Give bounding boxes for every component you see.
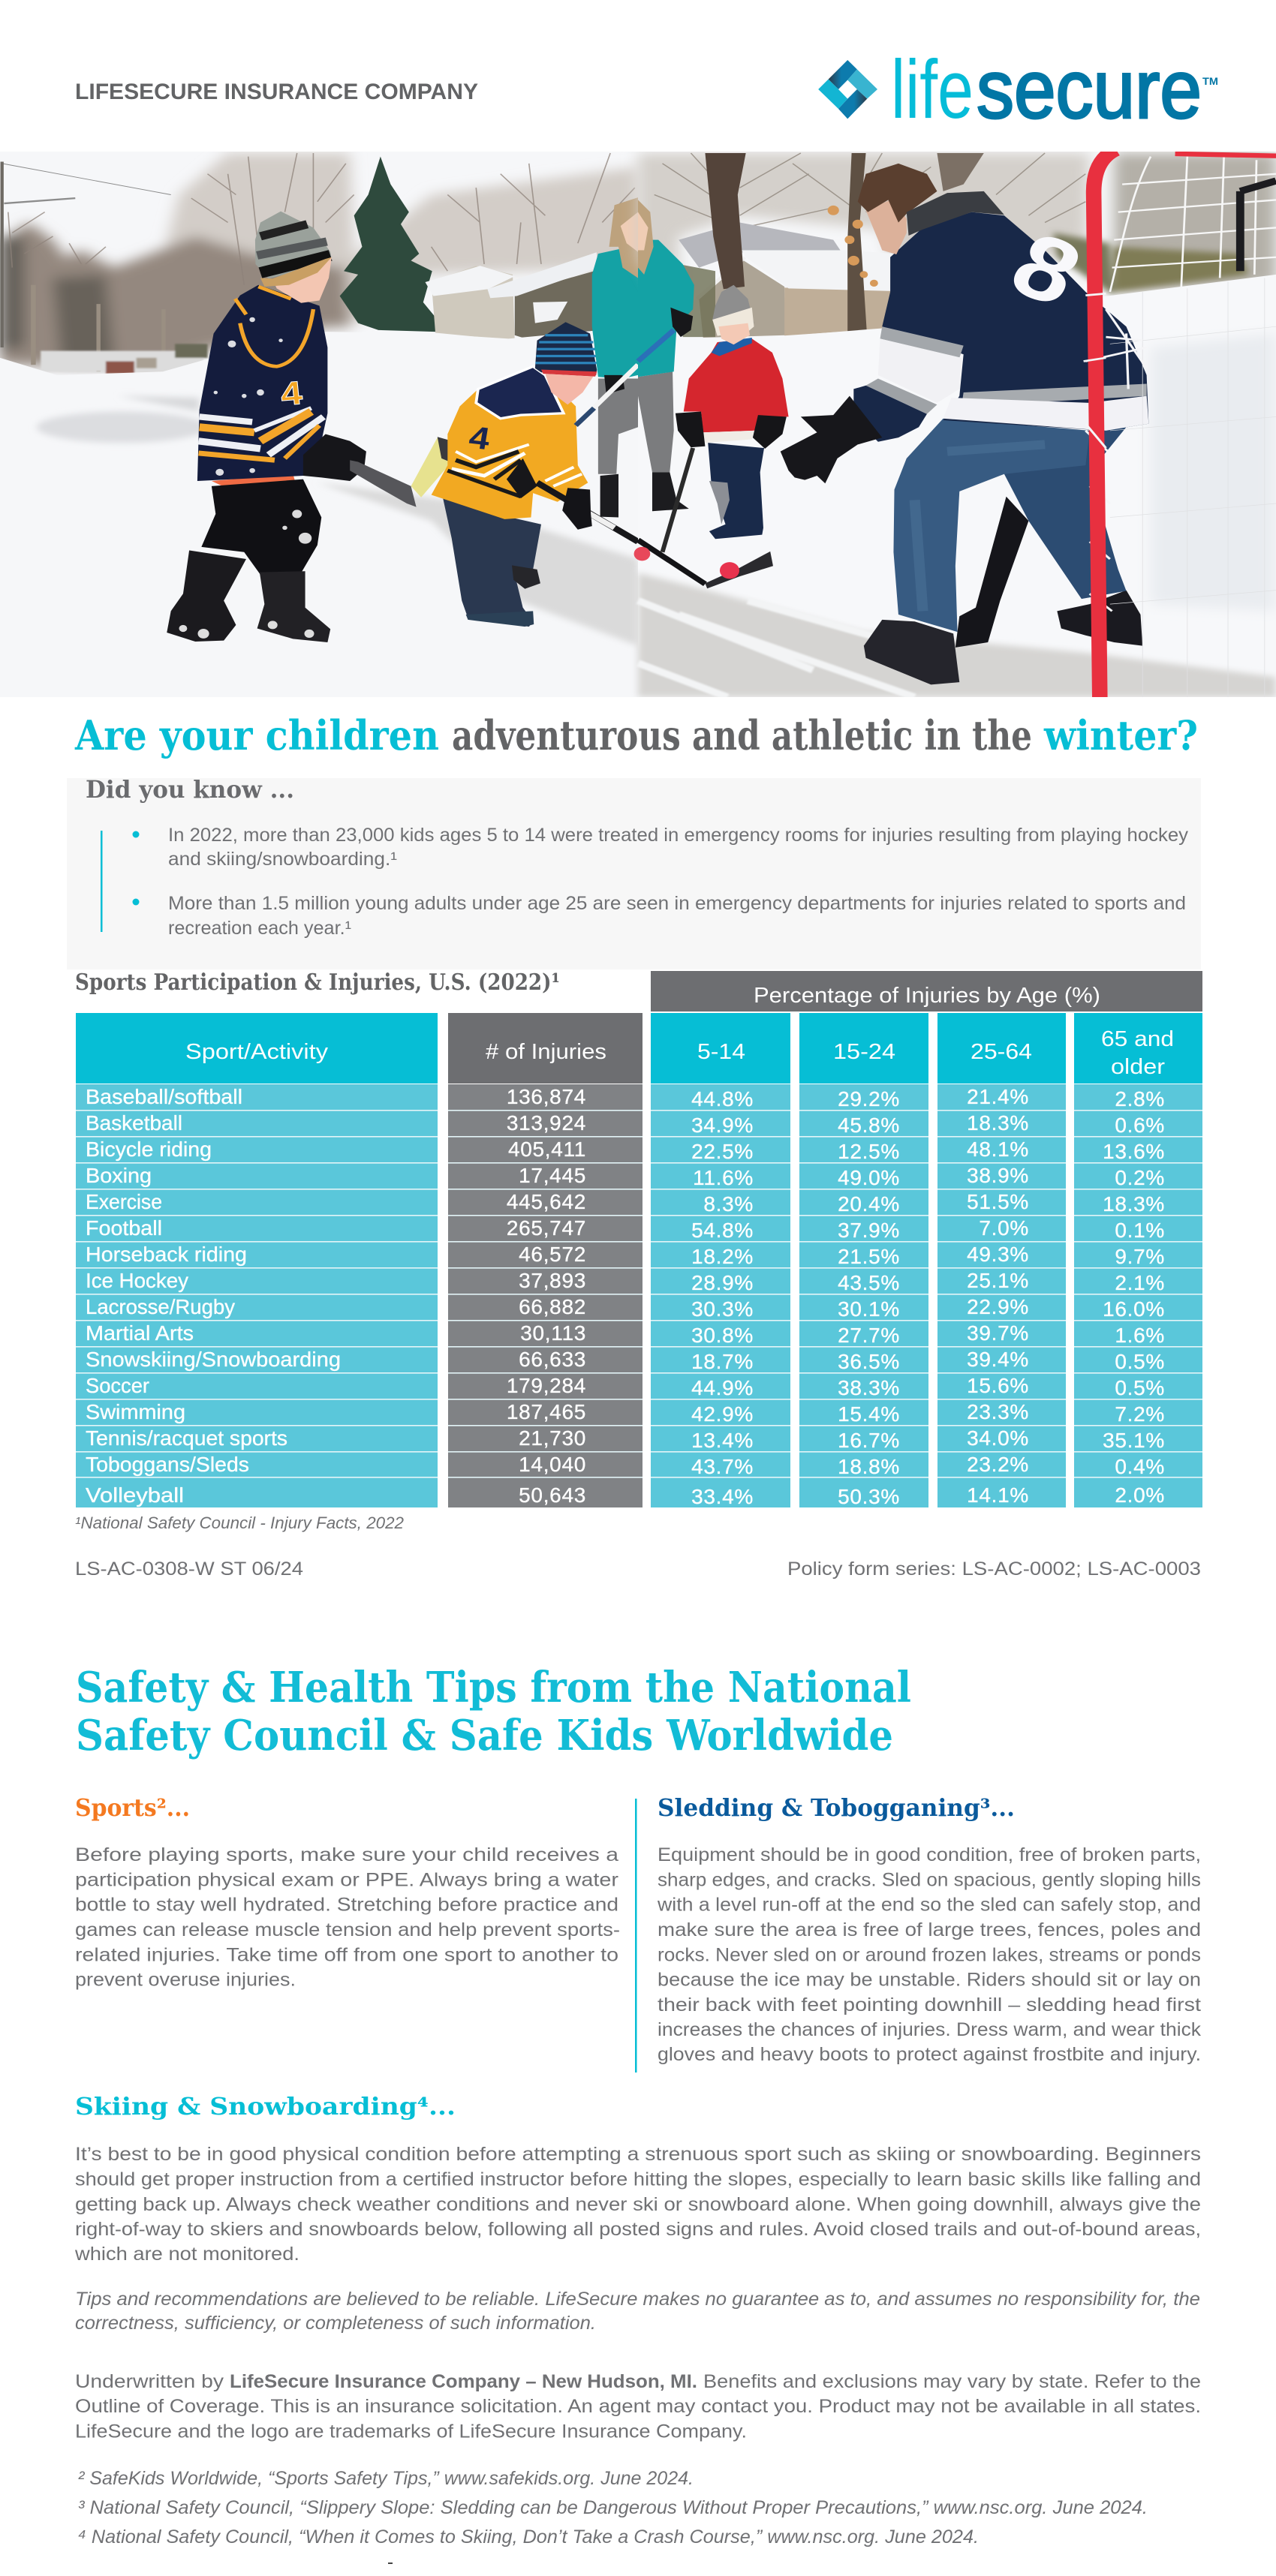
row: swimming: 23.3% bbox=[967, 1400, 1029, 1423]
row: lacrosse/rugby: 66,882 bbox=[519, 1295, 586, 1318]
body: sledding: sharp edges, and cracks. Sled on spacious, gently sloping hills bbox=[658, 1869, 1201, 1890]
row: snowskiing/snowboarding: 18.7% bbox=[691, 1350, 754, 1373]
main title: Are your children bbox=[74, 711, 439, 759]
row: tennis/racquet sports: 21,730 bbox=[519, 1426, 586, 1450]
row: lacrosse/rugby: Lacrosse/Rugby bbox=[86, 1295, 235, 1318]
body: sports: related injuries. Take time off from one sport to another to bbox=[75, 1944, 618, 1965]
row: toboggans/sleds: 14,040 bbox=[519, 1453, 586, 1476]
footnotes bbox=[78, 2468, 1148, 2547]
row: exercise: 445,642 bbox=[507, 1190, 586, 1213]
row: swimming bbox=[86, 1400, 1165, 1426]
heading: skiing: Skiing & Snowboarding⁴... bbox=[75, 2092, 456, 2121]
heading: did you know: Did you know ... bbox=[86, 775, 294, 804]
snow shading bbox=[1151, 333, 1276, 611]
row: soccer: 15.6% bbox=[967, 1374, 1029, 1397]
footnotes: ⁴ National Safety Council, “When it Comes to Skiing, Don’t Take a Crash Course,” www.nsc.org. June 2024. bbox=[78, 2526, 979, 2547]
row: snowskiing/snowboarding: Snowskiing/Snowboarding bbox=[86, 1348, 341, 1371]
header row: older bbox=[1111, 1055, 1165, 1079]
figure: father in navy jersey bbox=[781, 164, 1148, 684]
row: swimming: 42.9% bbox=[691, 1402, 754, 1426]
row: toboggans/sleds bbox=[86, 1453, 1165, 1478]
row: toboggans/sleds: 0.4% bbox=[1115, 1455, 1165, 1478]
row: volleyball: 2.0% bbox=[1115, 1483, 1165, 1507]
row: ice hockey: 37,893 bbox=[519, 1269, 586, 1292]
row: football: 7.0% bbox=[979, 1216, 1029, 1240]
header row bbox=[76, 1013, 1202, 1084]
policy form series: Policy form series: LS-AC-0002; LS-AC-0003 bbox=[787, 1559, 1201, 1580]
body: sledding bbox=[657, 1844, 1202, 2065]
body: sledding: Equipment should be in good condition, free of broken parts, bbox=[658, 1844, 1201, 1865]
underwriter statement: Underwritten by bbox=[75, 2371, 224, 2392]
bare branches left bbox=[8, 153, 635, 285]
row: basketball: 18.3% bbox=[967, 1111, 1029, 1135]
table footnote: ¹National Safety Council - Injury Facts, 2022 bbox=[75, 1513, 404, 1532]
trademark: TM bbox=[1202, 75, 1218, 87]
road bbox=[638, 573, 1276, 697]
figure: mother right part bbox=[638, 200, 694, 511]
row: tennis/racquet sports: 35.1% bbox=[1103, 1429, 1165, 1452]
header: percentage of injuries by age: Percentage of Injuries by Age (%) bbox=[754, 984, 1100, 1008]
row: tennis/racquet sports: Tennis/racquet sports bbox=[86, 1426, 287, 1450]
row: basketball: Basketball bbox=[86, 1111, 182, 1135]
photo: family playing street hockey in snow bbox=[0, 149, 1276, 697]
disclaimer bbox=[75, 2289, 1200, 2334]
body: sledding: gloves and heavy boots to protect against frostbite and injury. bbox=[658, 2044, 1201, 2065]
row: exercise: 51.5% bbox=[967, 1190, 1029, 1213]
section: skiing and snowboarding bbox=[74, 2092, 1201, 2265]
header row: 25-64 bbox=[971, 1040, 1032, 1064]
row: lacrosse/rugby: 16.0% bbox=[1103, 1297, 1165, 1321]
row: bicycle riding: Bicycle riding bbox=[86, 1138, 212, 1161]
row: swimming: 15.4% bbox=[838, 1402, 900, 1426]
hockey stick and balls bbox=[634, 540, 773, 588]
row: horseback riding: Horseback riding bbox=[86, 1243, 247, 1266]
row: snowskiing/snowboarding bbox=[86, 1348, 1165, 1373]
row: boxing: 17,445 bbox=[519, 1164, 586, 1187]
snowbank bbox=[638, 275, 1276, 697]
fact 2 bbox=[132, 893, 1186, 939]
row: basketball: 34.9% bbox=[691, 1114, 754, 1137]
disclaimer: Tips and recommendations are believed to be reliable. LifeSecure makes no guarantee as to, and assumes no responsibility for, the bbox=[75, 2289, 1200, 2310]
heading: sledding: Sledding & Tobogganing³... bbox=[658, 1793, 1015, 1822]
small print mark bbox=[388, 2562, 393, 2564]
row: toboggans/sleds: 18.8% bbox=[838, 1455, 900, 1478]
row: basketball: 0.6% bbox=[1115, 1114, 1165, 1137]
row: baseball/softball: 2.8% bbox=[1115, 1087, 1165, 1111]
figure: mother left part bbox=[576, 197, 638, 518]
header: company name: LIFESECURE INSURANCE COMPANY bbox=[75, 80, 478, 104]
form code: LS-AC-0308-W ST 06/24 bbox=[75, 1559, 303, 1580]
header row: 5-14 bbox=[697, 1040, 745, 1064]
body: sledding: make sure the area is free of large trees, fences, poles and bbox=[658, 1919, 1201, 1940]
body: sledding: with a level run-off at the end so the sled can safely stop, and bbox=[657, 1895, 1201, 1916]
header row: # of Injuries bbox=[486, 1040, 606, 1064]
figure: boy in navy jersey: 4 bbox=[279, 375, 304, 413]
body: sledding: rocks. Never sled on or around frozen lakes, streams or ponds bbox=[658, 1944, 1201, 1965]
row: swimming: 7.2% bbox=[1115, 1402, 1165, 1426]
row: horseback riding bbox=[86, 1243, 1165, 1268]
row: exercise: 8.3% bbox=[703, 1192, 754, 1216]
row: toboggans/sleds: 23.2% bbox=[967, 1453, 1029, 1476]
row: volleyball: Volleyball bbox=[86, 1483, 184, 1507]
row: toboggans/sleds: Toboggans/Sleds bbox=[86, 1453, 249, 1476]
goal net and post bbox=[1084, 149, 1276, 697]
row: martial arts: Martial Arts bbox=[86, 1321, 194, 1345]
row: football: Football bbox=[86, 1216, 162, 1240]
row: horseback riding: 21.5% bbox=[838, 1245, 900, 1268]
row: bicycle riding bbox=[86, 1138, 1165, 1163]
figure: father in navy jersey: 8 bbox=[995, 212, 1097, 325]
body: sports: bottle to stay well hydrated. Stretching before practice and bbox=[75, 1895, 618, 1916]
row: horseback riding: 46,572 bbox=[519, 1243, 586, 1266]
row: baseball/softball: 136,874 bbox=[507, 1085, 586, 1108]
row: baseball/softball bbox=[86, 1085, 1165, 1111]
column: sports tips bbox=[75, 1793, 620, 1991]
row: baseball/softball: Baseball/softball bbox=[86, 1085, 242, 1108]
figure: boy in yellow jersey: 4 bbox=[467, 419, 492, 456]
main title: winter? bbox=[1043, 711, 1198, 759]
row: boxing: 38.9% bbox=[967, 1164, 1029, 1187]
main title bbox=[74, 711, 1198, 759]
row: soccer: 44.9% bbox=[691, 1376, 754, 1399]
fact 1: and skiing/snowboarding.¹ bbox=[168, 849, 397, 870]
fact 2: More than 1.5 million young adults under age 25 are seen in emergency departments for injuries related to sports and bbox=[168, 893, 1186, 914]
row: exercise bbox=[86, 1190, 1165, 1216]
header: percentage of injuries by age bbox=[651, 971, 1202, 1011]
underwriter statement: Outline of Coverage. This is an insurance solicitation. An agent may contact you. Product may not be available in all states. bbox=[75, 2396, 1201, 2417]
body: skiing: right-of-way to skiers and snowboards below, following all posted signs and rules. Avoid closed trails and out-of-bound areas, bbox=[75, 2219, 1201, 2240]
header row: 15-24 bbox=[833, 1040, 895, 1064]
row: ice hockey: 2.1% bbox=[1115, 1271, 1165, 1294]
footnotes: ² SafeKids Worldwide, “Sports Safety Tips,” www.safekids.org. June 2024. bbox=[78, 2468, 694, 2489]
column: sledding tips bbox=[657, 1793, 1202, 2065]
row: baseball/softball: 44.8% bbox=[691, 1087, 754, 1111]
body: skiing: getting back up. Always check weather conditions and never ski or snowboard alone. When going downhill, always give the bbox=[75, 2194, 1201, 2215]
row: martial arts: 39.7% bbox=[967, 1321, 1029, 1345]
fact 2: recreation each year.¹ bbox=[168, 918, 351, 939]
underwriter statement bbox=[75, 2371, 1201, 2442]
fact 1 bbox=[132, 825, 1189, 870]
row: lacrosse/rugby: 30.3% bbox=[691, 1297, 754, 1321]
logo: lifesecure bbox=[818, 44, 1218, 136]
houses bbox=[432, 266, 515, 341]
body: sledding: because the ice may be unstable. Riders should sit or lay on bbox=[658, 1970, 1201, 1991]
row: soccer: 38.3% bbox=[838, 1376, 900, 1399]
row: ice hockey: 25.1% bbox=[967, 1269, 1029, 1292]
photo right half: background, child in red, father, goal bbox=[634, 149, 1276, 697]
row: basketball: 313,924 bbox=[507, 1111, 586, 1135]
row: volleyball: 14.1% bbox=[967, 1483, 1029, 1507]
body: sledding: increases the chances of injuries. Dress warm, and wear thick bbox=[658, 2019, 1202, 2040]
row: boxing: 11.6% bbox=[693, 1166, 754, 1189]
row: martial arts: 30,113 bbox=[520, 1321, 586, 1345]
row: martial arts: 1.6% bbox=[1115, 1324, 1165, 1347]
body: sports: Before playing sports, make sure your child receives a bbox=[75, 1844, 618, 1865]
row: ice hockey: Ice Hockey bbox=[86, 1269, 188, 1292]
row: soccer: 0.5% bbox=[1115, 1376, 1165, 1399]
row: boxing: Boxing bbox=[86, 1164, 152, 1187]
row: bicycle riding: 22.5% bbox=[691, 1140, 754, 1163]
body: skiing bbox=[74, 2144, 1201, 2265]
body: sports: participation physical exam or PPE. Always bring a water bbox=[75, 1869, 618, 1890]
row: bicycle riding: 13.6% bbox=[1103, 1140, 1165, 1163]
section title: safety and health tips bbox=[76, 1663, 911, 1760]
row: snowskiing/snowboarding: 0.5% bbox=[1115, 1350, 1165, 1373]
snow ground bbox=[0, 326, 638, 697]
header row: 65 and bbox=[1101, 1027, 1174, 1051]
body: sledding: their back with feet pointing downhill – sledding head first bbox=[658, 1994, 1201, 2015]
body: skiing: which are not monitored. bbox=[74, 2244, 299, 2265]
row: tennis/racquet sports: 34.0% bbox=[967, 1426, 1029, 1450]
body: sports: games can release muscle tension and help prevent sports- bbox=[75, 1919, 620, 1940]
row: bicycle riding: 48.1% bbox=[967, 1138, 1029, 1161]
row: soccer: Soccer bbox=[86, 1374, 149, 1397]
section title: safety and health tips: Safety & Health Tips from the National bbox=[76, 1663, 911, 1712]
row: exercise: 20.4% bbox=[838, 1192, 900, 1216]
underwriter statement: LifeSecure Insurance Company – New Hudson, MI. bbox=[230, 2371, 697, 2392]
row: baseball/softball: 21.4% bbox=[967, 1085, 1029, 1108]
row: ice hockey: 43.5% bbox=[838, 1271, 900, 1294]
row: ice hockey bbox=[86, 1269, 1165, 1294]
footnotes: ³ National Safety Council, “Slippery Slope: Sledding can be Dangerous Without Proper Precautions,” www.nsc.org. June 2024. bbox=[78, 2497, 1148, 2518]
icon: diamond mark bbox=[818, 60, 877, 119]
fact 1: In 2022, more than 23,000 kids ages 5 to 14 were treated in emergency rooms for injuries resulting from playing hockey bbox=[168, 825, 1189, 846]
row: snowskiing/snowboarding: 66,633 bbox=[519, 1348, 586, 1371]
row: exercise: 18.3% bbox=[1103, 1192, 1165, 1216]
row: horseback riding: 9.7% bbox=[1115, 1245, 1165, 1268]
divider bbox=[635, 1799, 636, 2073]
row: bicycle riding: 405,411 bbox=[508, 1138, 586, 1161]
heading: sports: Sports²... bbox=[75, 1793, 190, 1822]
row: swimming: 187,465 bbox=[507, 1400, 586, 1423]
underwriter statement: Benefits and exclusions may vary by state. Refer to the bbox=[703, 2371, 1201, 2392]
body: sports: prevent overuse injuries. bbox=[75, 1970, 296, 1991]
table title: Sports Participation & Injuries, U.S. (2022)¹ bbox=[75, 969, 560, 996]
bare branches right bbox=[655, 153, 1085, 230]
row: ice hockey: 28.9% bbox=[691, 1271, 754, 1294]
row: martial arts: 30.8% bbox=[691, 1324, 754, 1347]
row: soccer bbox=[86, 1374, 1165, 1399]
body: skiing: should get proper instruction from a certified instructor before hitting the slopes, especially to learn basic skills like falling and bbox=[75, 2169, 1201, 2190]
far street houses bbox=[41, 344, 207, 374]
row: football: 0.1% bbox=[1115, 1219, 1165, 1242]
row: lacrosse/rugby bbox=[86, 1295, 1165, 1321]
row: lacrosse/rugby: 30.1% bbox=[838, 1297, 900, 1321]
row: tennis/racquet sports bbox=[86, 1426, 1165, 1452]
row: snowskiing/snowboarding: 39.4% bbox=[967, 1348, 1029, 1371]
figure: boy in yellow jersey bbox=[432, 322, 638, 627]
row: volleyball: 50,643 bbox=[519, 1483, 586, 1507]
row: martial arts: 27.7% bbox=[838, 1324, 900, 1347]
row: lacrosse/rugby: 22.9% bbox=[967, 1295, 1029, 1318]
row: boxing: 49.0% bbox=[838, 1166, 900, 1189]
logo wordmark life: life bbox=[891, 44, 974, 136]
row: boxing bbox=[86, 1164, 1165, 1189]
main title: adventurous and athletic in the bbox=[452, 711, 1032, 759]
logo wordmark secure: secure bbox=[977, 44, 1202, 136]
row: volleyball: 50.3% bbox=[838, 1485, 900, 1508]
table: sports injuries by age bbox=[76, 971, 1202, 1508]
accent line bbox=[101, 831, 102, 932]
row: horseback riding: 18.2% bbox=[691, 1245, 754, 1268]
tree trunks bbox=[705, 153, 746, 289]
row: martial arts bbox=[86, 1321, 1165, 1347]
road shadows bbox=[37, 396, 638, 646]
row: horseback riding: 49.3% bbox=[967, 1243, 1029, 1266]
underwriter statement: LifeSecure and the logo are trademarks of LifeSecure Insurance Company. bbox=[75, 2421, 747, 2442]
row: snowskiing/snowboarding: 36.5% bbox=[838, 1350, 900, 1373]
body: skiing: It’s best to be in good physical condition before attempting a strenuous sport such as skiing or snowboarding. Beginners bbox=[75, 2144, 1201, 2165]
row: soccer: 179,284 bbox=[507, 1374, 586, 1397]
row: basketball bbox=[86, 1111, 1165, 1137]
figure: boy in navy jersey bbox=[167, 212, 455, 642]
row: football: 265,747 bbox=[507, 1216, 586, 1240]
evergreen tree bbox=[340, 157, 438, 332]
row: basketball: 45.8% bbox=[838, 1114, 900, 1137]
disclaimer: correctness, sufficiency, or completeness of such information. bbox=[75, 2313, 596, 2334]
figure: child in red sweater bbox=[663, 285, 789, 552]
table body cells bbox=[76, 1084, 1202, 1507]
row: tennis/racquet sports: 16.7% bbox=[838, 1429, 900, 1452]
row: football: 54.8% bbox=[691, 1219, 754, 1242]
row: boxing: 0.2% bbox=[1115, 1166, 1165, 1189]
row: tennis/racquet sports: 13.4% bbox=[691, 1429, 754, 1452]
row: volleyball bbox=[86, 1483, 1165, 1508]
row: toboggans/sleds: 43.7% bbox=[691, 1455, 754, 1478]
header row: Sport/Activity bbox=[185, 1040, 329, 1064]
body: sports bbox=[75, 1844, 620, 1991]
row: football: 37.9% bbox=[838, 1219, 900, 1242]
row: exercise: Exercise bbox=[86, 1190, 162, 1213]
shed and house bbox=[679, 222, 841, 268]
row: swimming: Swimming bbox=[86, 1400, 185, 1423]
panel: did you know bbox=[67, 775, 1201, 969]
row: baseball/softball: 29.2% bbox=[838, 1087, 900, 1111]
row: football bbox=[86, 1216, 1165, 1242]
row: bicycle riding: 12.5% bbox=[838, 1140, 900, 1163]
row: volleyball: 33.4% bbox=[691, 1485, 754, 1508]
section title: safety and health tips: Safety Council & Safe Kids Worldwide bbox=[76, 1711, 893, 1760]
photo left half: background, two boys bbox=[0, 153, 638, 697]
